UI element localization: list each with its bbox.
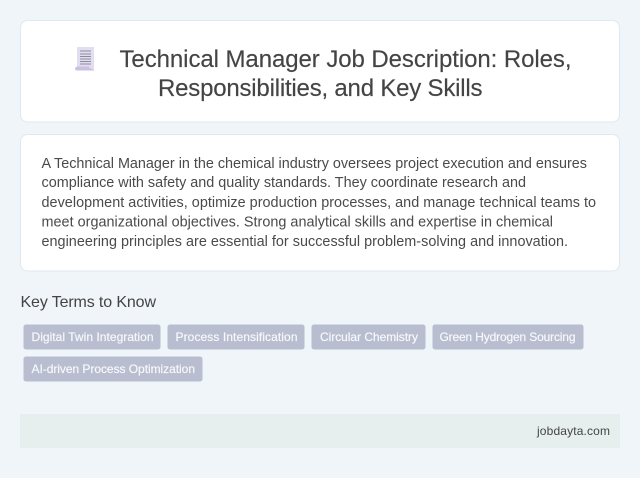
description text: meet organizational objectives. Strong analytical skills and expertise in chemical (42, 214, 553, 230)
tag: circular chemistry (312, 324, 426, 350)
footer source text: jobdayta.com (536, 424, 610, 438)
tag: process intensification: Process Intensification (176, 330, 298, 344)
title: Technical Manager Job Description: Roles, (120, 46, 572, 73)
description text (42, 156, 596, 250)
panel: description card (20, 134, 620, 271)
description text: development activities, optimize production processes, and manage technical teams to (42, 195, 596, 211)
tag: digital twin integration (24, 324, 160, 350)
footer bar (20, 414, 620, 448)
heading: key terms: Key Terms to Know (20, 294, 156, 311)
tag: ai-driven process optimization (24, 356, 202, 382)
tag: circular chemistry: Circular Chemistry (320, 330, 418, 344)
tag: green hydrogen sourcing: Green Hydrogen Sourcing (440, 330, 576, 344)
tag: green hydrogen sourcing (432, 324, 584, 350)
title (120, 46, 572, 102)
tag: digital twin integration: Digital Twin Integration (32, 330, 154, 344)
panel: title card (20, 20, 620, 122)
tag list (24, 324, 584, 382)
description text: compliance with safety and quality standards. They coordinate research and (42, 175, 526, 191)
tag: process intensification (168, 324, 304, 350)
tag: ai-driven process optimization: AI-driven Process Optimization (32, 362, 195, 376)
title: Responsibilities, and Key Skills (158, 75, 482, 102)
icon: document scroll (75, 47, 94, 70)
description text: A Technical Manager in the chemical industry oversees project execution and ensures (42, 156, 587, 172)
description text: engineering principles are essential for successful problem-solving and innovation. (42, 234, 568, 250)
